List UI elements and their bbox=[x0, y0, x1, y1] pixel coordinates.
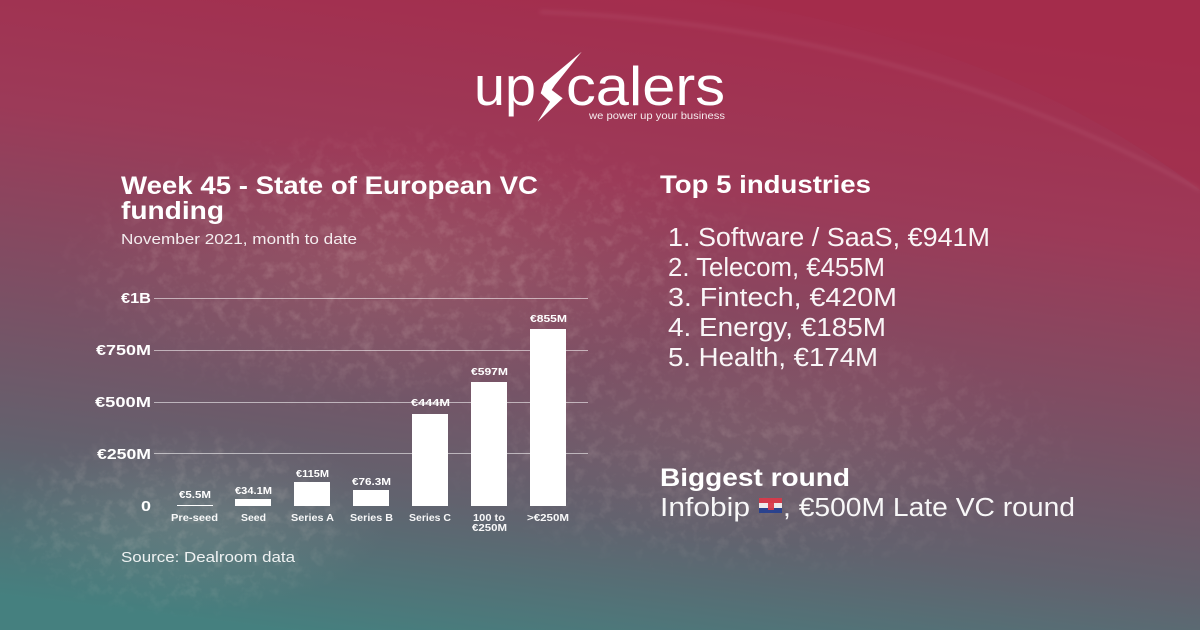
category labels: Series A bbox=[291, 513, 334, 524]
icon: lightning bolt bbox=[538, 52, 582, 122]
bar value labels bbox=[179, 313, 567, 501]
bars bbox=[177, 329, 566, 506]
top 5 industries heading: Top 5 industries bbox=[660, 171, 871, 199]
category labels: €250M bbox=[472, 523, 507, 534]
category labels: >€250M bbox=[527, 513, 569, 524]
logo: upscalers bbox=[474, 52, 725, 122]
industries list: 4. Energy, €185M bbox=[668, 314, 886, 342]
y axis gridlines and labels: €1B bbox=[121, 290, 151, 307]
icon: Croatian flag bbox=[759, 498, 782, 513]
chart subtitle: November 2021, month to date bbox=[121, 231, 357, 248]
y axis gridlines and labels: €250M bbox=[97, 446, 151, 463]
biggest round detail: , €500M Late VC round bbox=[783, 494, 1075, 522]
industries list: 2. Telecom, €455M bbox=[668, 254, 885, 282]
bar value labels: €115M bbox=[296, 468, 329, 480]
category labels: Pre-seed bbox=[171, 513, 218, 524]
category labels bbox=[171, 513, 569, 534]
chart heading bbox=[121, 172, 538, 225]
bar value labels: €76.3M bbox=[352, 476, 391, 488]
logo wordmark left: up bbox=[474, 55, 536, 117]
category labels: Series C bbox=[409, 513, 451, 524]
chart heading: funding bbox=[121, 197, 224, 225]
category labels: Series B bbox=[350, 513, 393, 524]
y axis gridlines and labels: €500M bbox=[95, 394, 151, 411]
bar value labels: €5.5M bbox=[179, 489, 211, 501]
bar value labels: €444M bbox=[411, 397, 450, 409]
y axis gridlines and labels: 0 bbox=[141, 498, 151, 515]
y axis gridlines and labels: €750M bbox=[96, 342, 151, 359]
category labels: 100 to bbox=[473, 513, 505, 524]
y axis gridlines and labels bbox=[95, 290, 588, 515]
chart heading: Week 45 - State of European VC bbox=[121, 172, 538, 200]
logo wordmark right: calers bbox=[566, 55, 725, 117]
industries list bbox=[668, 224, 990, 372]
industries list: 3. Fintech, €420M bbox=[668, 284, 897, 312]
industries list: 1. Software / SaaS, €941M bbox=[668, 224, 990, 252]
category labels: Seed bbox=[241, 513, 266, 524]
biggest round heading: Biggest round bbox=[660, 464, 850, 492]
logo tagline: we power up your business bbox=[588, 110, 725, 122]
bar chart bbox=[95, 290, 588, 534]
source note: Source: Dealroom data bbox=[121, 549, 296, 566]
bar value labels: €597M bbox=[471, 366, 508, 378]
industries list: 5. Health, €174M bbox=[668, 344, 878, 372]
bar value labels: €34.1M bbox=[235, 485, 272, 497]
biggest round detail bbox=[660, 494, 1075, 522]
bar value labels: €855M bbox=[530, 313, 567, 325]
biggest round detail: Infobip bbox=[660, 494, 750, 522]
